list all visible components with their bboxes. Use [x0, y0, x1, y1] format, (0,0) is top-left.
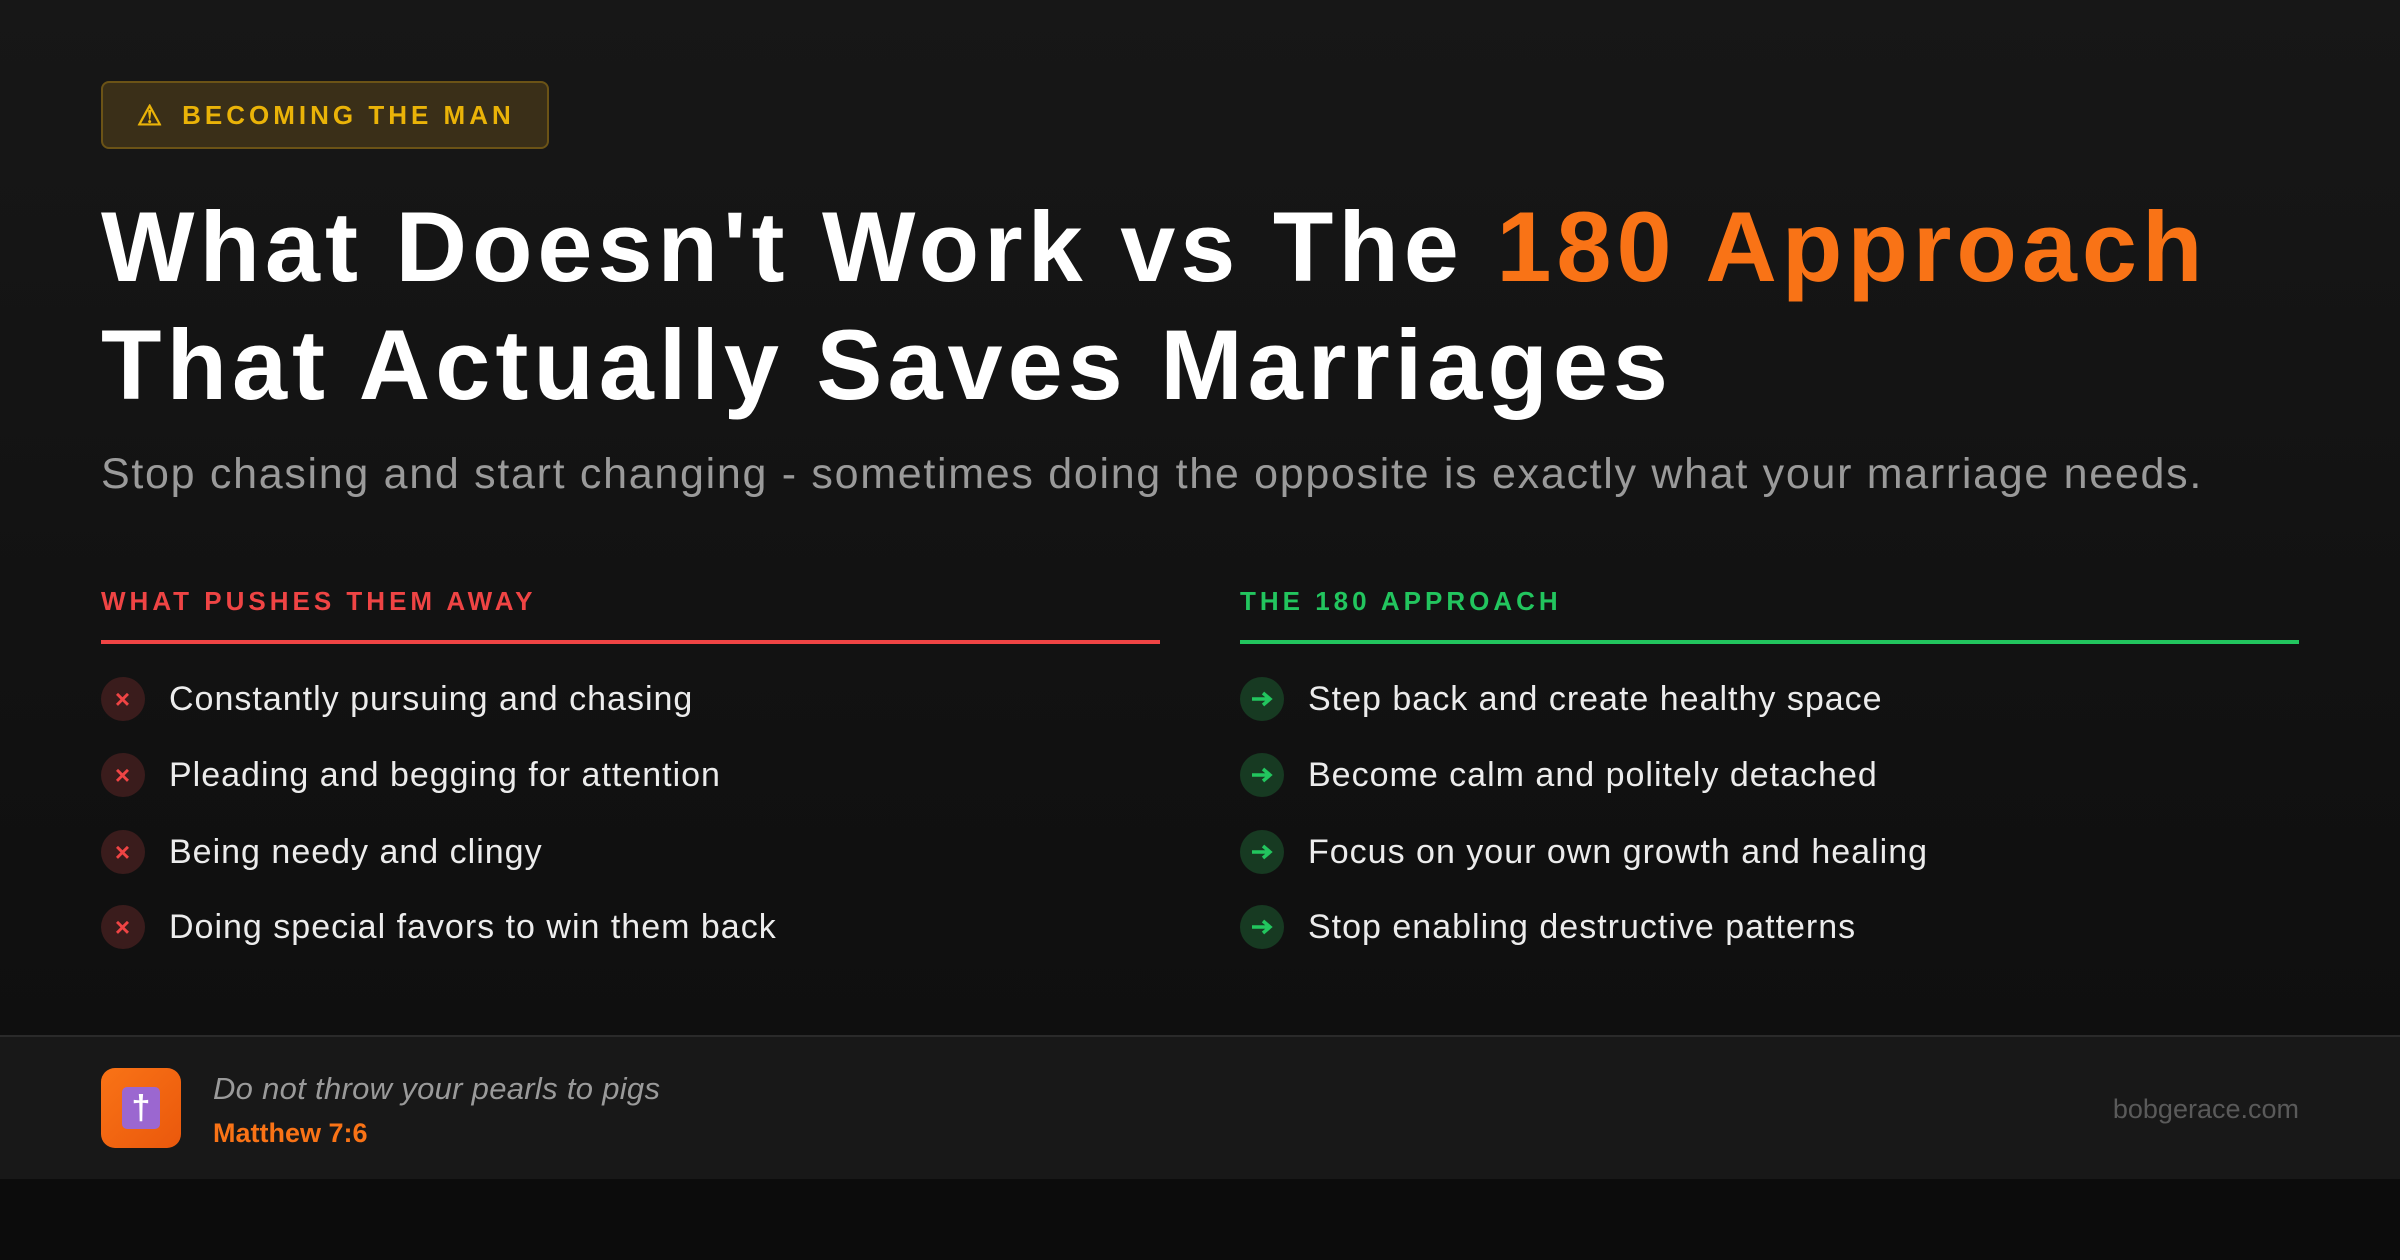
item: Step back and create healthy space — [1308, 680, 1883, 718]
icon: cross — [101, 1068, 181, 1148]
item: Pleading and begging for attention — [169, 756, 721, 794]
panel: what pushes them away — [101, 586, 1160, 949]
item: × — [115, 837, 131, 867]
item: Being needy and clingy — [169, 832, 543, 870]
item: Become calm and politely detached — [1308, 756, 1878, 794]
badge: BECOMING THE MAN — [182, 100, 515, 130]
quote text: Do not throw your pearls to pigs — [213, 1071, 660, 1106]
badge — [101, 81, 549, 149]
subtitle: Stop chasing and start changing - sometimes doing the opposite is exactly what your marriage needs. — [101, 450, 2203, 498]
item: Stop enabling destructive patterns — [1308, 908, 1856, 946]
icon: cross: † — [132, 1088, 150, 1126]
title: That Actually Saves Marriages — [101, 309, 1673, 420]
item: × — [115, 684, 131, 714]
badge: ⚠ — [137, 100, 166, 130]
heading: what pushes them away: WHAT PUSHES THEM AWAY — [101, 586, 537, 616]
title: What Doesn't Work vs The 180 Approach — [101, 191, 2207, 302]
citation: Matthew 7:6 — [213, 1118, 368, 1148]
item: Constantly pursuing and chasing — [169, 680, 693, 718]
website: bobgerace.com — [2113, 1094, 2299, 1124]
item: Focus on your own growth and healing — [1308, 832, 1928, 870]
item: Doing special favors to win them back — [169, 908, 777, 946]
title — [101, 191, 2207, 420]
heading: the 180 approach: THE 180 APPROACH — [1240, 586, 1562, 616]
item: × — [115, 912, 131, 942]
footer — [0, 1035, 2400, 1179]
item: × — [115, 760, 131, 790]
panel: the 180 approach — [1240, 586, 2299, 949]
